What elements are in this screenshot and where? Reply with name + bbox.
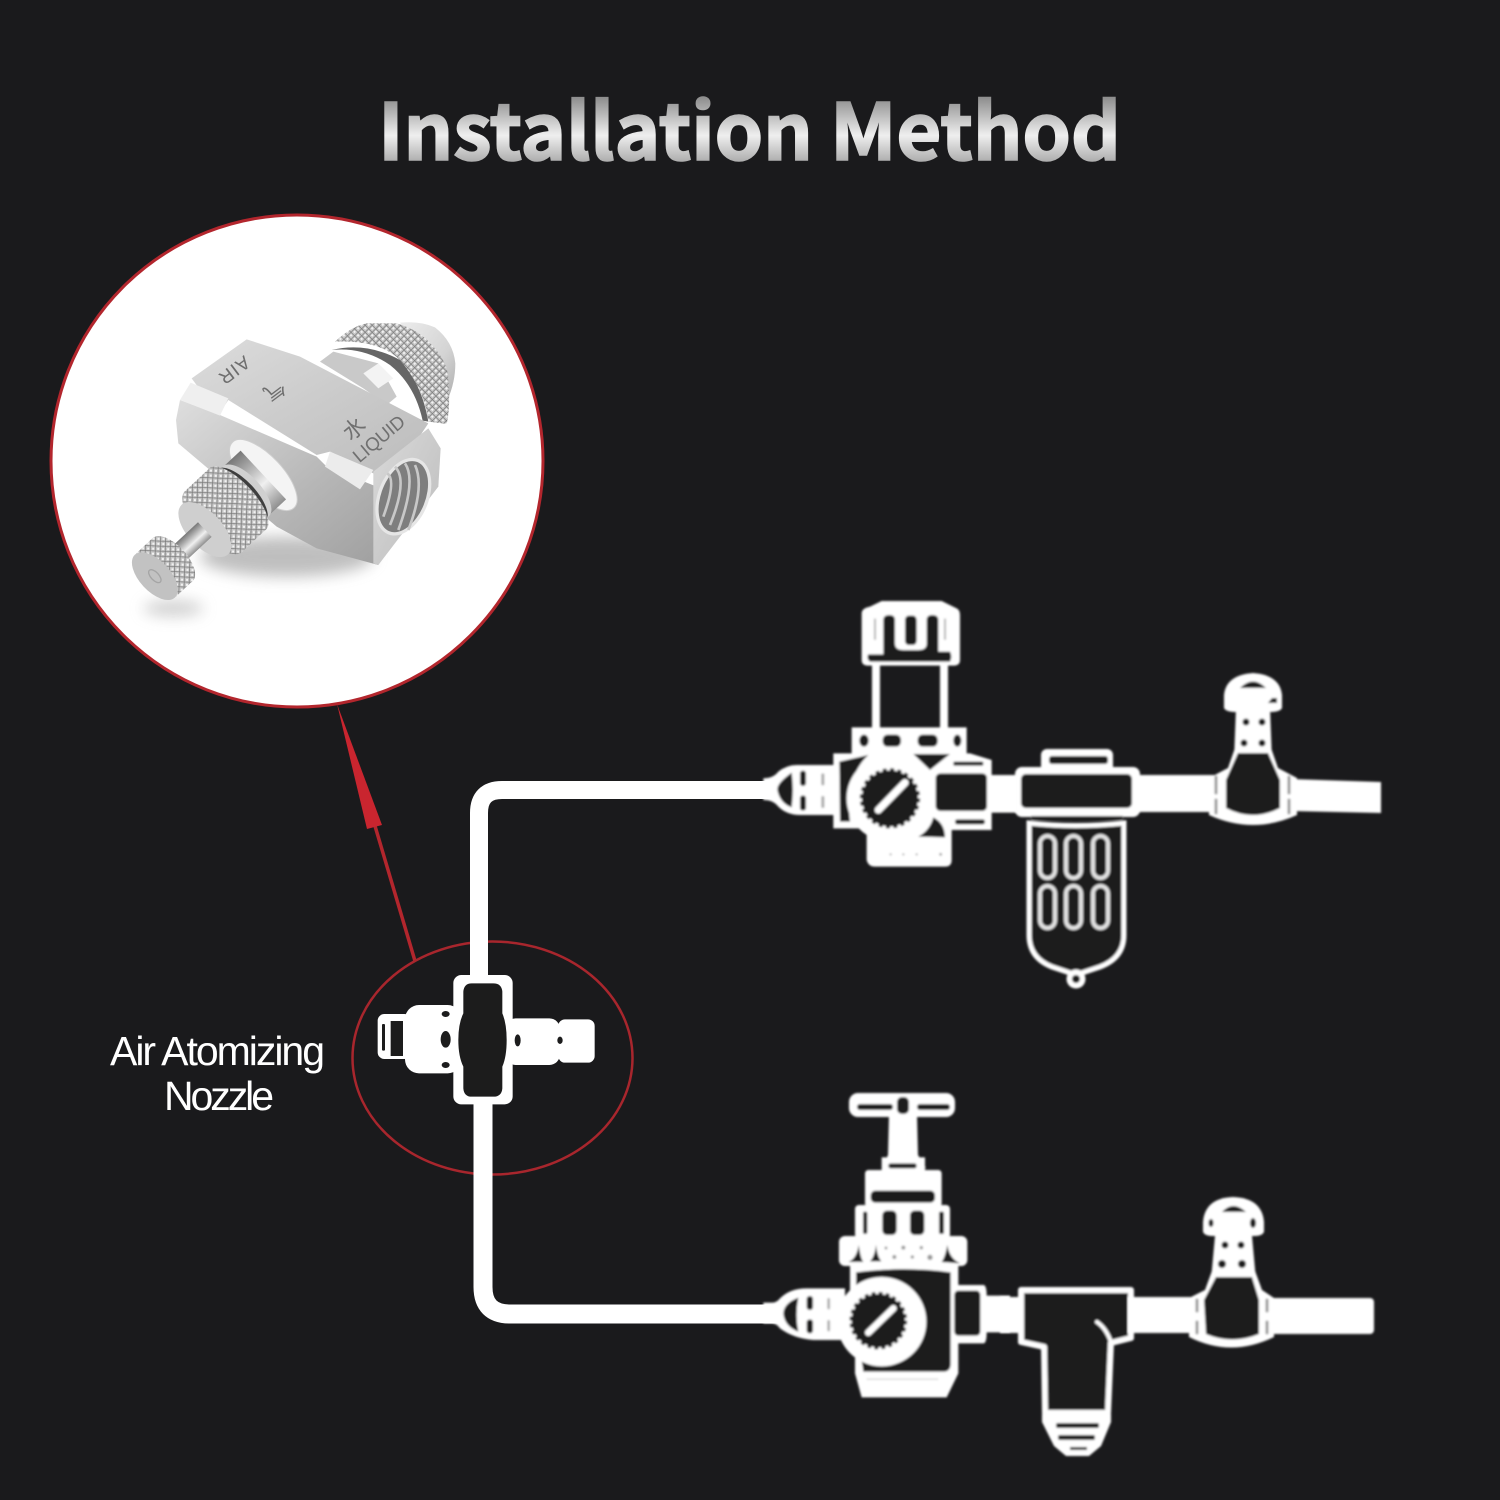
icon: lower valve and pipe end [1128, 1197, 1374, 1348]
arrow [337, 704, 415, 961]
label: Air Atomizing [110, 1028, 325, 1074]
filter elements [1040, 836, 1108, 928]
regulator body [763, 727, 1018, 867]
regulator stack [763, 1157, 1010, 1397]
title: Installation Method [378, 71, 1121, 183]
front assembly [113, 429, 308, 620]
pipe: bottom branch [483, 1095, 795, 1314]
icon: upper filter [1015, 749, 1140, 988]
highlight ellipse [352, 942, 632, 1174]
icon: lower regulator [763, 1093, 1010, 1397]
t-handle [849, 1093, 955, 1117]
body end face [373, 428, 441, 565]
body side face [176, 400, 378, 565]
back assembly [320, 322, 455, 424]
icon: upper regulator [763, 601, 1018, 867]
icon: lower t-filter [1000, 1290, 1131, 1456]
label: Nozzle [164, 1073, 274, 1119]
engraved text: air: AIR [215, 352, 254, 389]
body top face [192, 339, 428, 473]
icon: nozzle symbol [378, 975, 595, 1104]
drain fitting [1042, 1414, 1111, 1456]
chamfers [180, 383, 228, 416]
pipe: top branch [479, 790, 785, 985]
filter bowl [1029, 823, 1124, 975]
engraved text: liquid: LIQUID [348, 411, 409, 466]
regulator knob [862, 601, 960, 666]
icon: upper valve and pipe end [1135, 673, 1381, 825]
engraved text: water character: 水 [335, 408, 372, 447]
panel: product photo circle [51, 215, 543, 707]
regulator neck [876, 665, 944, 735]
drain [1066, 970, 1086, 988]
photo: air atomizing nozzle [113, 322, 455, 620]
label [110, 1028, 325, 1119]
engraved text: gas character: 气 [258, 374, 293, 410]
